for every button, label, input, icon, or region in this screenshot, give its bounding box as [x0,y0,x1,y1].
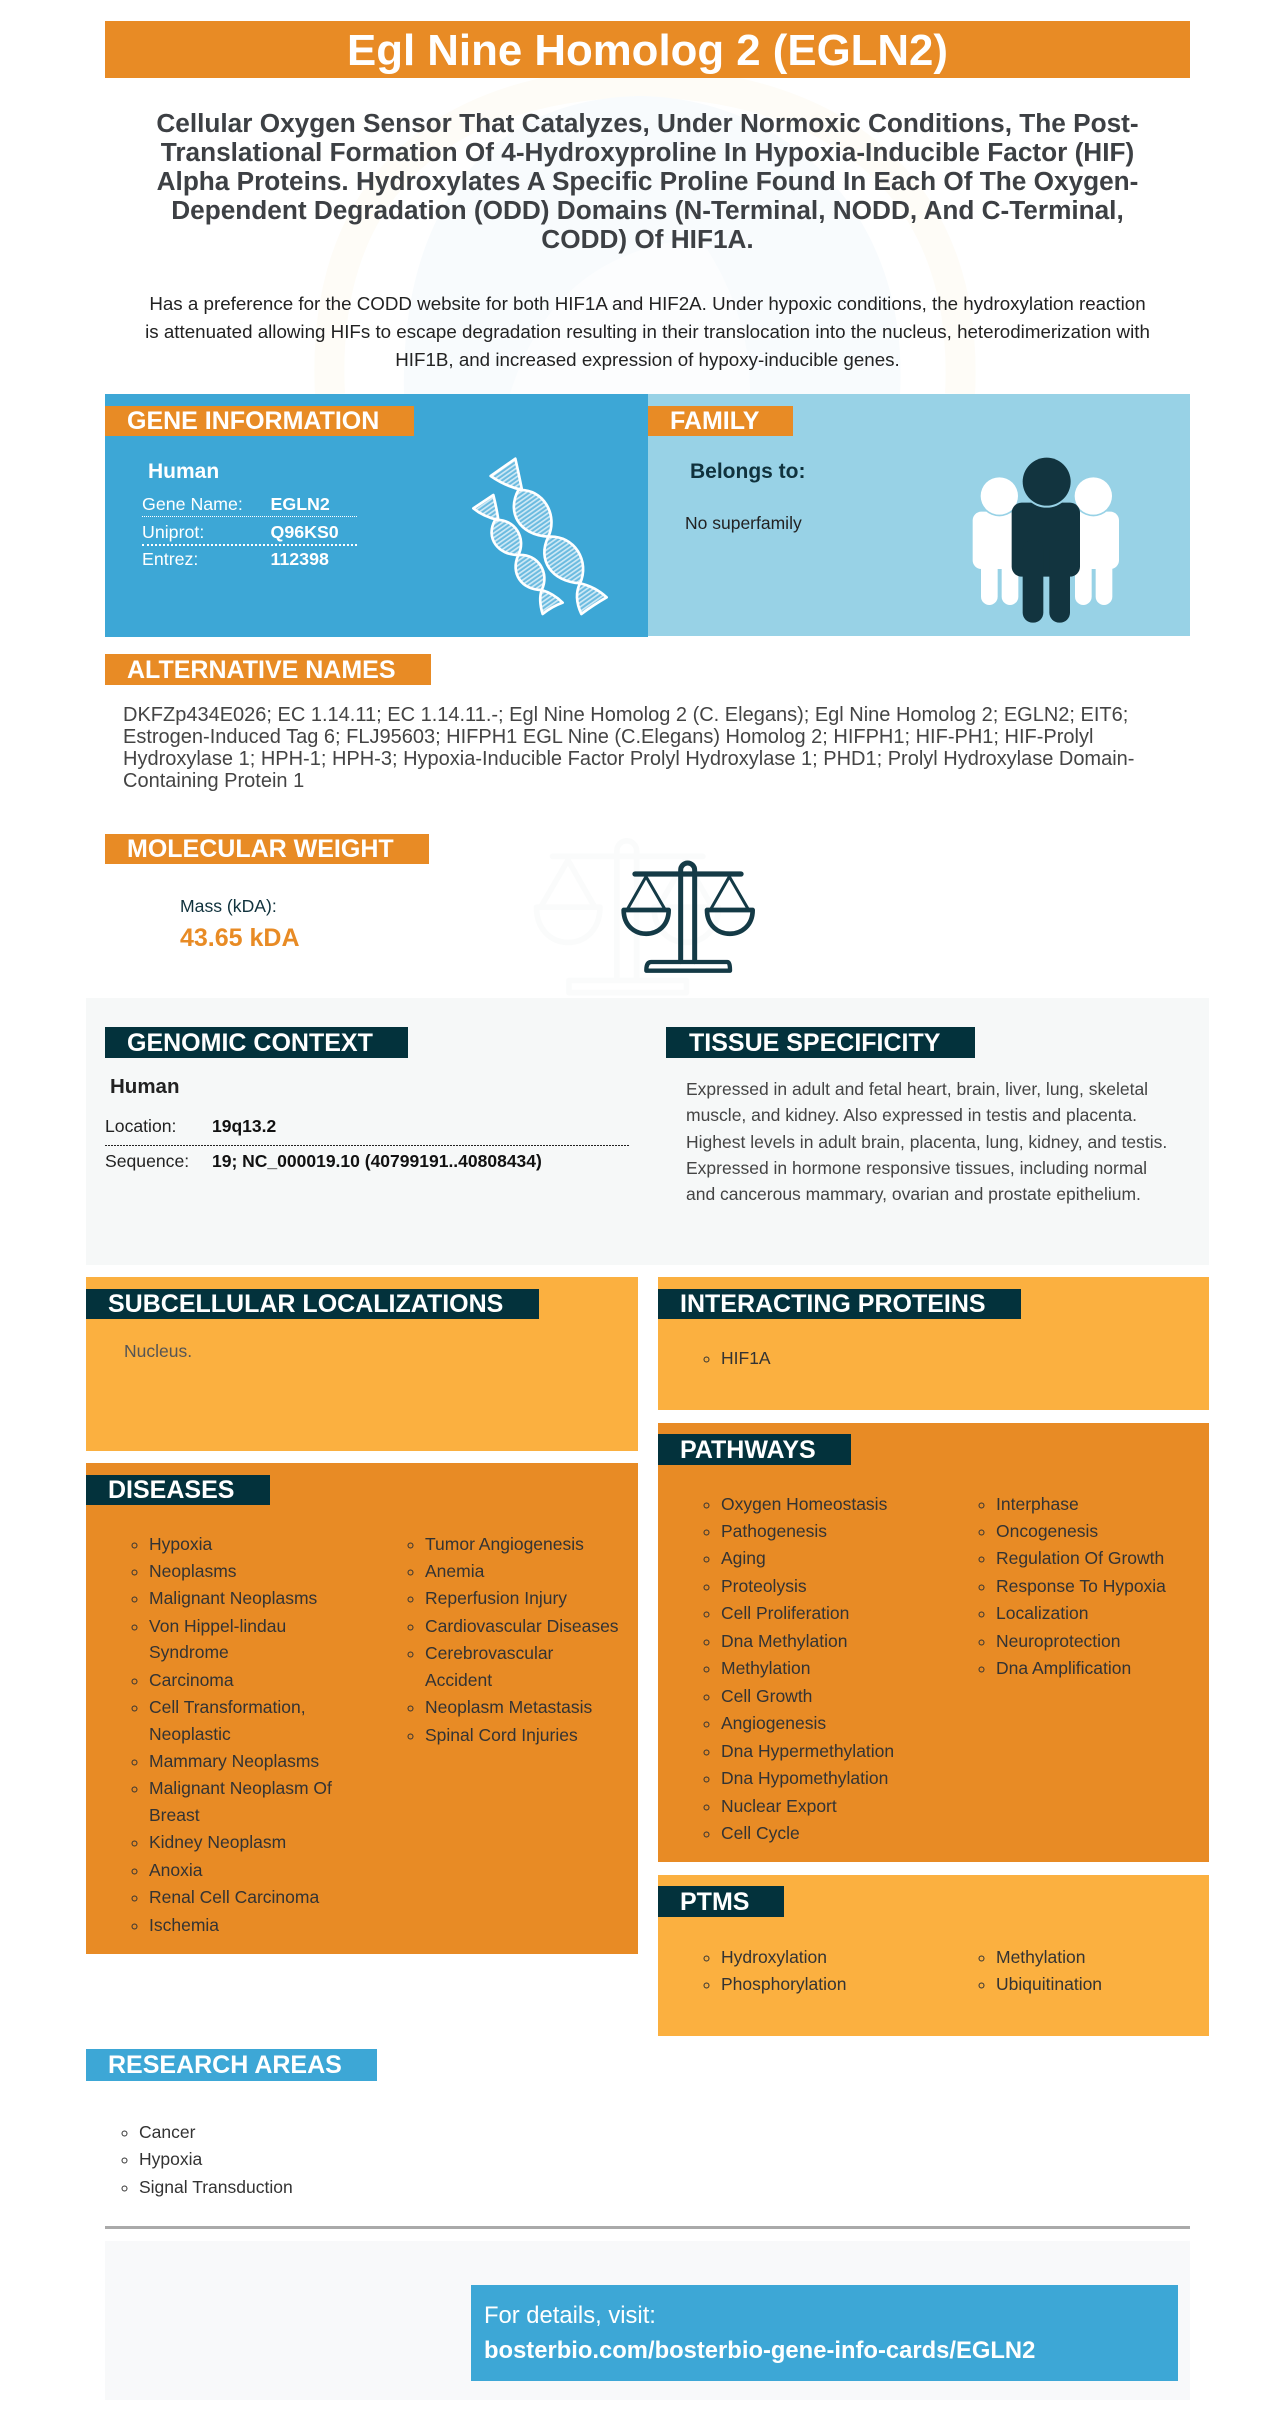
pathways list column 2: Response To Hypoxia [996,1576,1166,1596]
diseases list column 1: Kidney Neoplasm [149,1832,286,1852]
panel: interacting proteins [658,1277,1209,1410]
heading: family: FAMILY [670,407,759,435]
panel: footer [105,2241,1190,2400]
gene fields table: Entrez: [142,549,198,569]
diseases list column 1: Ischemia [149,1915,219,1935]
pathways list column 2: Regulation Of Growth [996,1548,1164,1568]
diseases list column 2: Spinal Cord Injuries [425,1725,578,1745]
diseases list column 1 [132,1534,332,1935]
pathways list column 1: Cell Proliferation [721,1603,849,1623]
PTMs list column 2: Ubiquitination [996,1974,1102,1994]
diseases list column 2: Tumor Angiogenesis [425,1534,584,1554]
diseases list column 1: Mammary Neoplasms [149,1751,319,1771]
gene fields table: Q96KS0 [270,522,339,542]
pathways list column 2 [978,1494,1166,1678]
gene fields table: EGLN2 [270,494,330,514]
PTMs list column 2: Methylation [996,1946,1086,1966]
pathways list column 1: Cell Growth [721,1686,812,1706]
research areas list: Cancer [139,2122,195,2142]
heading: interacting proteins: INTERACTING PROTEINS [680,1290,986,1318]
description paragraph [145,293,1150,370]
PTMs list column 1: Hydroxylation [721,1946,827,1966]
heading: PTMs: PTMS [680,1888,749,1916]
mass value: 43.65 kDA [180,924,300,952]
panel: diseases [86,1463,638,1954]
PTMs list column 1: Phosphorylation [721,1974,846,1994]
diseases list column 1: Breast [149,1805,200,1825]
pathways list column 2: Interphase [996,1494,1079,1514]
subtitle: Cellular Oxygen Sensor That Catalyzes, Under Normoxic Conditions, The Post- [156,108,1139,138]
diseases list column 1: Von Hippel-lindau [149,1616,286,1636]
title banner: Egl Nine Homolog 2 (EGLN2) [347,26,948,75]
diseases list column 2: Cerebrovascular [425,1643,553,1663]
pathways list column 1: Aging [721,1548,766,1568]
location row: Location: [105,1116,176,1136]
superfamily value: No superfamily [685,513,802,533]
diseases list column 2: Neoplasm Metastasis [425,1697,592,1717]
tissue specificity text [686,1079,1167,1204]
pathways list column 1: Methylation [721,1658,810,1678]
callout label: For details, visit: [484,2302,656,2329]
diseases list column 2: Accident [425,1670,492,1690]
alternative names text: DKFZp434E026; EC 1.14.11; EC 1.14.11.-; Egl Nine Homolog 2 (C. Elegans); Egl Nine Homolog 2; EGLN2; EIT6; [123,704,1128,726]
research areas list: Hypoxia [139,2149,202,2169]
diseases list column 1: Neoplasms [149,1561,237,1581]
panel: genomic context and tissue specificity: 19; NC_000019.10 (40799191..40808434) [212,1151,542,1171]
sequence row: Sequence: [105,1151,189,1171]
heading: pathways: PATHWAYS [680,1436,816,1464]
pathways list column 2: Oncogenesis [996,1521,1098,1541]
subtitle: Alpha Proteins. Hydroxylates A Specific Proline Found In Each Of The Oxygen- [157,166,1138,196]
belongs to label: Belongs to: [690,460,806,483]
diseases list column 1: Syndrome [149,1642,229,1662]
heading: molecular weight: MOLECULAR WEIGHT [127,835,394,863]
watermark: faint logo behind headline [300,78,1000,394]
panel: family [648,394,1190,636]
subtitle: Translational Formation Of 4-Hydroxyproline In Hypoxia-Inducible Factor (HIF) [161,137,1134,167]
pathways list column 1: Angiogenesis [721,1713,826,1733]
subtitle: Dependent Degradation (ODD) Domains (N-Terminal, NODD, And C-Terminal, [171,195,1124,225]
alternative names text: Hydroxylase 1; HPH-1; HPH-3; Hypoxia-Inducible Factor Prolyl Hydroxylase 1; PHD1; Prolyl Hydroxylase Domain- [123,748,1134,770]
panel: PTMs [658,1875,1209,2036]
heading: diseases [86,1475,270,1505]
description paragraph: HIF1B, and increased expression of hypoxy-inducible genes. [395,349,900,370]
heading: PTMs [658,1886,784,1917]
pathways list column 1: Cell Cycle [721,1823,800,1843]
diseases list column 2: Cardiovascular Diseases [425,1616,619,1636]
pathways list column 1: Pathogenesis [721,1521,827,1541]
heading: genomic context: GENOMIC CONTEXT [127,1029,373,1057]
alternative names text: Estrogen-Induced Tag 6; FLJ95603; HIFPH1 EGL Nine (C.Elegans) Homolog 2; HIFPH1; HIF-PH1; HIF-Prolyl [123,726,1093,748]
callout url: bosterbio.com/bosterbio-gene-info-cards/EGLN2 [484,2337,1035,2364]
panel: genomic context and tissue specificity: 19q13.2 [212,1116,276,1136]
heading: diseases: DISEASES [108,1476,234,1504]
pathways list column 1: Nuclear Export [721,1796,837,1816]
alternative names text: Containing Protein 1 [123,770,304,792]
icon: group of people [972,458,1119,623]
tissue specificity text: Expressed in adult and fetal heart, brain, liver, lung, skeletal [686,1079,1148,1099]
pathways list column 1: Dna Hypomethylation [721,1768,888,1788]
diseases list column 1: Anoxia [149,1860,203,1880]
callout: details link [471,2285,1178,2381]
tissue specificity text: Expressed in hormone responsive tissues, including normal [686,1158,1147,1178]
pathways list column 1: Dna Hypermethylation [721,1741,894,1761]
pathways list column 1 [704,1494,894,1843]
gene fields table: 112398 [270,549,329,569]
icon: DNA double helix [472,457,608,616]
panel: subcellular localizations [86,1277,638,1451]
description paragraph: is attenuated allowing HIFs to escape degradation resulting in their translocation into the nucleus, heterodimerization with [145,321,1150,342]
localization text: Nucleus. [124,1341,192,1361]
tissue specificity text: Highest levels in adult brain, placenta, lung, kidney, and testis. [686,1132,1167,1152]
subtitle: CODD) Of HIF1A. [541,224,754,254]
interacting proteins list: HIF1A [721,1348,771,1368]
heading: alternative names: ALTERNATIVE NAMES [127,656,396,684]
diseases list column 1: Carcinoma [149,1670,234,1690]
research areas list [122,2122,293,2197]
pathways list column 2: Dna Amplification [996,1658,1131,1678]
diseases list column 1: Neoplastic [149,1724,231,1744]
heading: research areas: RESEARCH AREAS [108,2051,342,2079]
research areas list: Signal Transduction [139,2177,293,2197]
diseases list column 1: Malignant Neoplasms [149,1588,317,1608]
icon: balance scale [621,860,755,973]
description paragraph: Has a preference for the CODD website for both HIF1A and HIF2A. Under hypoxic conditions, the hydroxylation reaction [149,293,1146,314]
heading: gene information: GENE INFORMATION [127,407,379,435]
heading: pathways [658,1434,851,1465]
pathways list column 2: Localization [996,1603,1088,1623]
species label: Human [110,1075,179,1098]
diseases list column 2 [408,1534,619,1745]
heading: subcellular localizations: SUBCELLULAR LOCALIZATIONS [108,1290,503,1318]
pathways list column 1: Oxygen Homeostasis [721,1494,887,1514]
pathways list column 1: Dna Methylation [721,1631,847,1651]
heading: tissue specificity: TISSUE SPECIFICITY [689,1029,940,1057]
diseases list column 1: Malignant Neoplasm Of [149,1778,332,1798]
heading: family [648,406,793,436]
mass label: Mass (kDA): [180,896,277,916]
gene fields table: Gene Name: [142,494,243,514]
alternative names text [123,704,1134,792]
panel: gene information [105,394,648,637]
gene fields table [142,494,357,569]
diseases list column 2: Anemia [425,1561,484,1581]
gene fields table: Uniprot: [142,522,204,542]
PTMs list column 2 [978,1946,1102,1994]
subtitle [156,108,1139,254]
diseases list column 1: Cell Transformation, [149,1697,306,1717]
tissue specificity text: and cancerous mammary, ovarian and prostate epithelium. [686,1184,1141,1204]
diseases list column 2: Reperfusion Injury [425,1588,567,1608]
diseases list column 1: Renal Cell Carcinoma [149,1887,319,1907]
panel: genomic context and tissue specificity [86,998,1209,1265]
diseases list column 1: Hypoxia [149,1534,212,1554]
species label: Human [148,460,219,483]
panel: pathways [658,1423,1209,1862]
PTMs list column 1 [704,1946,846,1994]
pathways list column 2: Neuroprotection [996,1631,1121,1651]
title banner [105,21,1190,78]
tissue specificity text: muscle, and kidney. Also expressed in testis and placenta. [686,1105,1137,1125]
pathways list column 1: Proteolysis [721,1576,807,1596]
